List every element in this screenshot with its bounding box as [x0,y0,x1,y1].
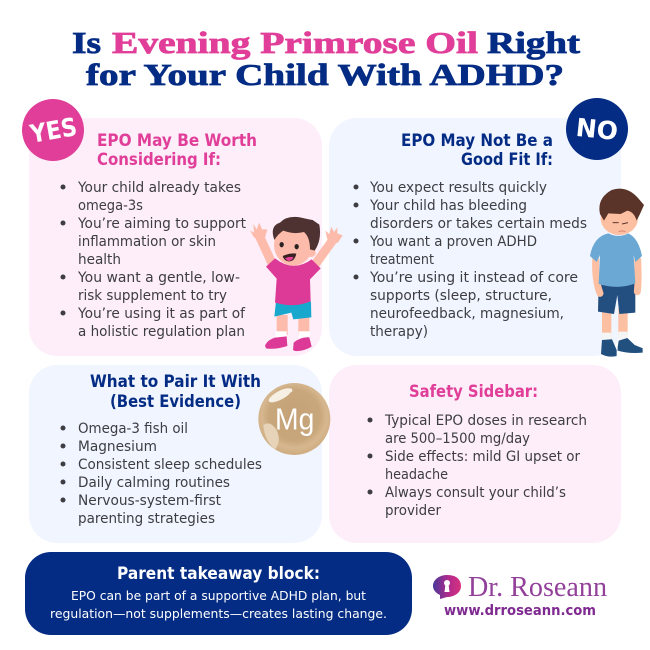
badge: YES [22,99,84,161]
panel: EPO may be worth considering [29,118,322,356]
heading: pair it with [90,372,261,411]
heading: pair it with: What to Pair It With [90,372,261,391]
icon: magnesium capsule: Mg [275,402,314,436]
bullet list: worth considering: You’re using it as part of [77,306,246,322]
bullet list: not a good fit: You’re using it instead of core [369,270,578,286]
illustration: happy boy with arms raised [250,217,343,351]
bullet list: safety: are 500–1500 mg/day [385,431,530,447]
callout: parent takeaway: EPO can be part of a supportive ADHD plan, but [71,589,366,604]
heading: worth considering: EPO May Be Worth [97,131,257,150]
bullet list: worth considering: health [78,252,121,268]
logo: Dr. Roseann: Dr. Roseann [468,571,607,603]
logo: Dr. Roseann [433,571,607,619]
bullet list: safety: Typical EPO doses in research [384,413,587,429]
title [72,25,581,92]
bullet list: not a good fit: Your child has bleeding [369,198,527,214]
bullet list: not a good fit: You expect results quickly [369,180,547,196]
bullet list: pairings: parenting strategies [78,511,215,527]
bullet list: not a good fit: You want a proven ADHD [369,234,537,250]
badge: YES: YES [27,112,79,149]
bullet list: pairings: Daily calming routines [78,475,230,491]
panel: what to pair it with [29,365,322,543]
heading: worth considering: Considering If: [97,150,221,169]
callout: parent takeaway [25,552,412,635]
bullet list: not a good fit: therapy) [370,324,428,340]
bullet list: worth considering: a holistic regulation plan [78,324,245,340]
panel: EPO may not be a good fit [329,118,621,356]
callout: parent takeaway: Parent takeaway block: [117,564,320,583]
bullet list: pairings [60,421,262,527]
panel: safety sidebar [329,365,621,543]
bullet list: safety: headache [385,467,448,483]
heading: worth considering [97,131,257,169]
bullet list: not a good fit: neurofeedback, magnesium, [370,306,564,322]
icon: magnesium capsule [258,383,330,455]
logo: Dr. Roseann: www.drroseann.com [444,603,596,619]
heading: pair it with: (Best Evidence) [110,392,241,411]
bullet list: worth considering: You want a gentle, low- [77,270,240,286]
bullet list: pairings: Consistent sleep schedules [78,457,262,473]
bullet list: pairings: Nervous-system-first [78,493,221,509]
bullet list: not a good fit [354,180,587,340]
bullet list: not a good fit: supports (sleep, structure, [370,288,552,304]
bullet list: safety: provider [385,503,441,519]
bullet list: not a good fit: treatment [370,252,434,268]
heading: not a good fit: EPO May Not Be a [401,131,553,150]
icon: speech bubble keyhole [433,575,461,599]
illustration: sad boy looking down [590,189,644,357]
badge: NO [566,98,628,160]
bullet list: safety: Always consult your child’s [385,485,566,501]
badge: NO: NO [575,113,619,146]
callout: parent takeaway: regulation—not supplements—creates lasting change. [50,607,387,622]
bullet list: worth considering: You’re aiming to support [77,216,246,232]
bullet list: worth considering: inflammation or skin [78,234,216,250]
title: Evening Primrose Oil [112,25,478,60]
bullet list: pairings: Omega-3 fish oil [78,421,188,437]
heading: not a good fit: Good Fit If: [461,150,553,169]
heading: not a good fit [401,131,553,169]
heading: safety sidebar: Safety Sidebar: [409,382,538,401]
bullet list: safety: Side effects: mild GI upset or [385,449,580,465]
bullet list: worth considering [60,180,246,340]
bullet list: worth considering: Your child already takes [77,180,241,196]
bullet list: worth considering: risk supplement to try [78,288,227,304]
bullet list: not a good fit: disorders or takes certain meds [370,216,587,232]
title: Is [72,25,101,60]
title: Right [487,25,581,60]
bullet list: worth considering: omega-3s [78,198,143,214]
title: for Your Child With ADHD? [86,57,564,92]
bullet list: pairings: Magnesium [78,439,157,455]
bullet list: safety [368,413,587,519]
